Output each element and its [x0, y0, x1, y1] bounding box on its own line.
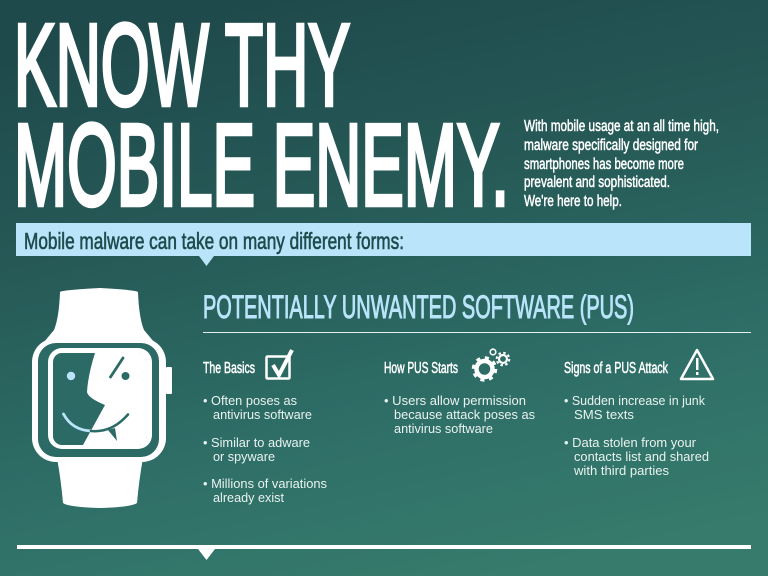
- bottom divider with pointer: [17, 545, 751, 560]
- column: the basics: • Millions of variations: [203, 476, 327, 491]
- intro text: malware specifically designed for: [524, 137, 698, 154]
- column: signs of a PUS attack: • Data stolen from your: [564, 435, 697, 450]
- column: how PUS starts: • Users allow permission: [384, 393, 526, 408]
- column: signs of a PUS attack: contacts list and shared: [574, 449, 709, 464]
- column: how PUS starts: [384, 349, 535, 436]
- column: signs of a PUS attack: with third parties: [573, 463, 669, 478]
- intro text: We're here to help.: [524, 193, 622, 210]
- banner: [16, 223, 751, 266]
- icon: smartwatch with face: [32, 288, 172, 508]
- title: KNOW THY: [14, 0, 350, 130]
- column: how PUS starts: antivirus software: [394, 421, 493, 436]
- intro text: [524, 118, 719, 210]
- column: signs of a PUS attack: • Sudden increase in junk: [564, 393, 705, 408]
- intro text: prevalent and sophisticated.: [524, 174, 670, 191]
- column: the basics: [203, 350, 327, 505]
- column: signs of a PUS attack: Signs of a PUS Attack: [564, 360, 668, 377]
- column: how PUS starts: because attack poses as: [394, 407, 535, 422]
- intro text: smartphones has become more: [524, 156, 684, 173]
- icon: warning triangle: [681, 350, 713, 379]
- column: signs of a PUS attack: SMS texts: [574, 407, 634, 422]
- column: the basics: or spyware: [213, 449, 275, 464]
- column: the basics: The Basics: [203, 360, 255, 377]
- icon: checkbox: [266, 350, 292, 378]
- banner: Mobile malware can take on many different forms:: [24, 228, 404, 254]
- column: the basics: • Often poses as: [203, 393, 297, 408]
- column: the basics: • Similar to adware: [203, 435, 310, 450]
- column: the basics: antivirus software: [213, 407, 312, 422]
- column: the basics: already exist: [213, 490, 284, 505]
- column: signs of a PUS attack: [564, 350, 713, 478]
- title: [14, 0, 509, 230]
- icon: gears: [474, 349, 509, 380]
- column: how PUS starts: How PUS Starts: [384, 360, 458, 377]
